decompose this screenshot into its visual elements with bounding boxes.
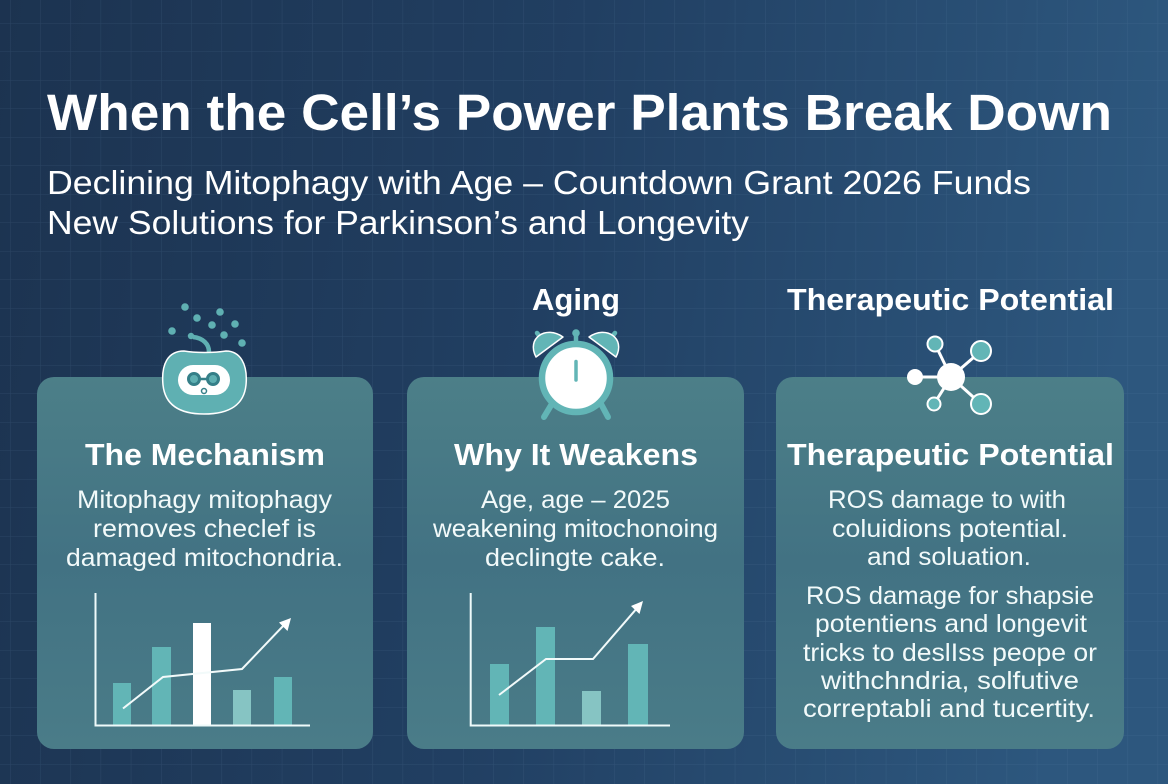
panel: The Mechanism <box>37 377 373 749</box>
text block: therapeutic description 2: correptabli and tucertity. <box>803 695 1095 723</box>
bar chart: mechanism <box>96 593 310 726</box>
subtitle: Declining Mitophagy with Age – Countdown Grant 2026 Funds <box>47 164 1031 201</box>
text block: therapeutic description 1 <box>828 486 1068 571</box>
text block: therapeutic description 2: ROS damage for shapsie <box>806 582 1094 610</box>
icon: alarm clock <box>533 329 619 417</box>
title: When the Cell’s Power Plants Break Down <box>47 84 1112 141</box>
heading: Therapeutic Potential (upper): Therapeutic Potential <box>787 282 1114 317</box>
bar chart: weakening <box>471 593 670 726</box>
text block: mechanism description: damaged mitochondria. <box>66 544 343 572</box>
text block: therapeutic description 2: tricks to deslIss peope or <box>803 639 1097 667</box>
text block: therapeutic description 1: coluidions potential. <box>832 515 1068 543</box>
text block: weakening description: weakening mitochonoing <box>432 515 718 543</box>
text block: weakening description: Age, age – 2025 <box>481 486 670 514</box>
subtitle: New Solutions for Parkinson’s and Longevity <box>47 204 750 241</box>
text block: therapeutic description 2: withchndria, solfutive <box>820 667 1079 695</box>
text block: therapeutic description 2 <box>803 582 1097 723</box>
panel: Why It Weakens <box>407 377 744 749</box>
panel heading: The Mechanism: The Mechanism <box>85 437 325 472</box>
text block: weakening description <box>432 486 718 572</box>
text block: therapeutic description 1: and soluation. <box>867 543 1031 571</box>
text block: mechanism description <box>66 486 343 572</box>
icon: molecule network <box>907 336 991 414</box>
text block: therapeutic description 1: ROS damage to with <box>828 486 1066 514</box>
text block: mechanism description: Mitophagy mitophagy <box>77 486 333 514</box>
text block: weakening description: declingte cake. <box>485 544 665 572</box>
panel: Therapeutic Potential <box>776 377 1124 749</box>
text block: mechanism description: removes checlef is <box>93 515 316 543</box>
panel heading: Therapeutic Potential: Therapeutic Potential <box>787 437 1114 472</box>
subtitle <box>47 164 1031 241</box>
heading: Aging: Aging <box>532 282 620 317</box>
icon: mitochondrion <box>163 303 246 414</box>
text block: therapeutic description 2: potentiens and longevit <box>815 610 1087 638</box>
panel heading: Why It Weakens: Why It Weakens <box>454 437 698 472</box>
